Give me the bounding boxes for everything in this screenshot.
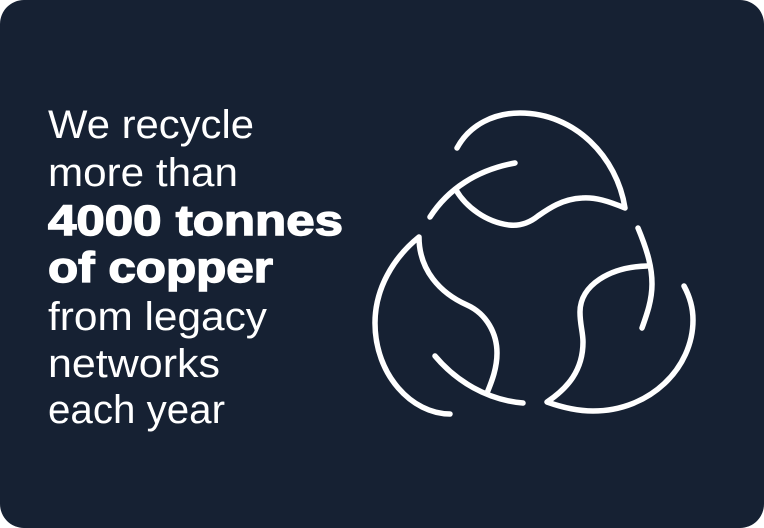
highlighted figure: of copper <box>48 244 273 292</box>
icon: left leaf <box>375 237 523 414</box>
highlighted figure: 4000 tonnes <box>48 197 343 245</box>
text block: recycling statement: more than <box>48 151 238 195</box>
text block: recycling statement: networks <box>48 342 220 386</box>
highlighted figure <box>48 197 343 292</box>
text block: recycling statement: We recycle <box>48 103 254 147</box>
icon: three-leaf recycling symbol <box>375 113 693 414</box>
icon: top leaf <box>430 113 625 225</box>
text block: recycling statement <box>48 103 343 432</box>
text block: recycling statement: from legacy <box>48 295 267 339</box>
text block: recycling statement: each year <box>48 388 225 432</box>
icon: right leaf <box>547 228 693 411</box>
